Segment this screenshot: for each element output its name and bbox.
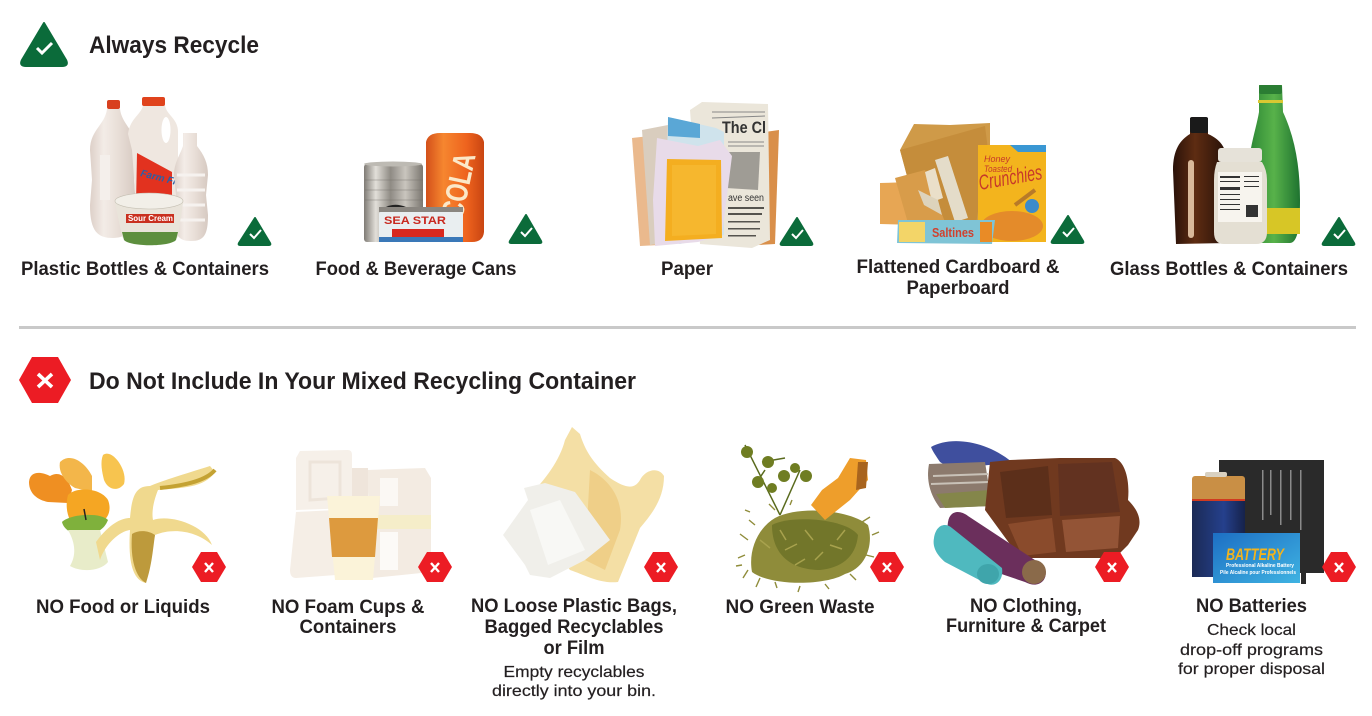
note: drop-off programs [1180,642,1323,659]
label: NO Batteries [1196,596,1307,617]
illustration: paper stack: The Cl [722,118,766,137]
label: NO Green Waste [726,597,874,618]
heading: Do Not Include In Your Mixed Recycling Container [19,357,636,403]
panel: glass bottles and containers [1110,85,1354,280]
illustration: cans: SEA STAR [384,215,446,227]
illustration: cardboard and cereal box: Crunchies [977,161,1044,195]
label: NO Food or Liquids [36,597,210,618]
icon: small X badge [870,552,904,582]
illustration: cardboard and cereal box: Saltines [932,225,974,240]
illustration: cans [364,133,484,242]
label: Paperboard [906,278,1010,299]
icon: large green check triangle [21,23,67,66]
illustration: batteries: BATTERY [1226,545,1285,564]
note [1178,622,1325,678]
icon: large red X hexagon [19,357,71,403]
label [856,257,1060,299]
illustration: grass clippings and leaf [736,445,879,592]
illustration: fruit peels and banana [29,454,215,583]
label [946,596,1107,637]
icon: small X badge [1095,552,1129,582]
illustration: batteries: Professional Alkaline Battery [1226,563,1295,569]
label: NO Clothing, [970,596,1082,617]
illustration: cans: COLA [435,150,483,221]
label: NO Foam Cups & [272,597,425,618]
illustration: plastic bottles: Milk [137,192,164,208]
panel: paper [632,102,812,280]
illustration: plastic bottles: Farm Fresh [139,168,195,192]
illustration: cardboard and cereal box [880,123,1046,244]
icon: small check badge [239,218,270,245]
illustration: paper stack [632,102,779,248]
illustration: cardboard and cereal box: Toasted [984,164,1013,174]
illustration: paper stack: ave seen [728,193,764,204]
label: Food & Beverage Cans [316,259,516,280]
icon: small check badge [510,215,541,243]
illustration: plastic bottles: Sour Cream [128,214,173,223]
label [272,597,425,638]
illustration: cardboard and cereal box: Honey [984,154,1010,164]
note: directly into your bin. [492,683,656,700]
icon: small X badge [418,552,452,582]
illustration: sofa, pillow, blankets and rugs [928,441,1140,585]
title text: Do Not Include In Your Mixed Recycling Container [89,368,636,395]
panel: food and beverage cans [316,133,541,280]
note [492,664,656,700]
label: or Film [544,638,604,659]
panel: no loose plastic bags [471,427,678,700]
label: Paper [661,259,714,280]
label [471,596,677,659]
label: NO Loose Plastic Bags, [471,596,677,617]
illustration: plastic bottles [90,97,208,245]
label: Furniture & Carpet [946,616,1107,637]
label: Flattened Cardboard & [856,257,1060,278]
note: Empty recyclables [504,664,644,681]
panel: no food or liquids [29,454,226,618]
heading: Always Recycle [21,23,259,66]
illustration: batteries: Pile Alcaline pour Professionnels [1220,570,1296,576]
label: Plastic Bottles & Containers [21,259,269,280]
illustration: foam containers and cup [290,450,431,580]
icon: small X badge [644,552,678,582]
icon: small check badge [1052,216,1083,243]
label: Containers [300,617,396,638]
label: Bagged Recyclables [484,617,664,638]
illustration: glass bottles and jar [1173,85,1300,244]
panel: flattened cardboard and paperboard [856,123,1083,299]
label: Glass Bottles & Containers [1110,259,1348,280]
panel: plastic bottles and containers [21,97,270,280]
panel: no clothing furniture and carpet [928,441,1140,637]
panel: no foam cups and containers [272,450,452,638]
title text: Always Recycle [89,32,259,59]
illustration: batteries [1192,460,1324,584]
note: for proper disposal [1178,661,1325,678]
icon: small check badge [1323,218,1354,245]
icon: small X badge [1322,552,1356,582]
illustration: plastic bags [503,427,664,582]
panel: no green waste [726,445,904,618]
note: Check local [1207,622,1296,639]
icon: small X badge [192,552,226,582]
icon: small check badge [781,218,812,245]
panel: no batteries [1178,460,1356,678]
